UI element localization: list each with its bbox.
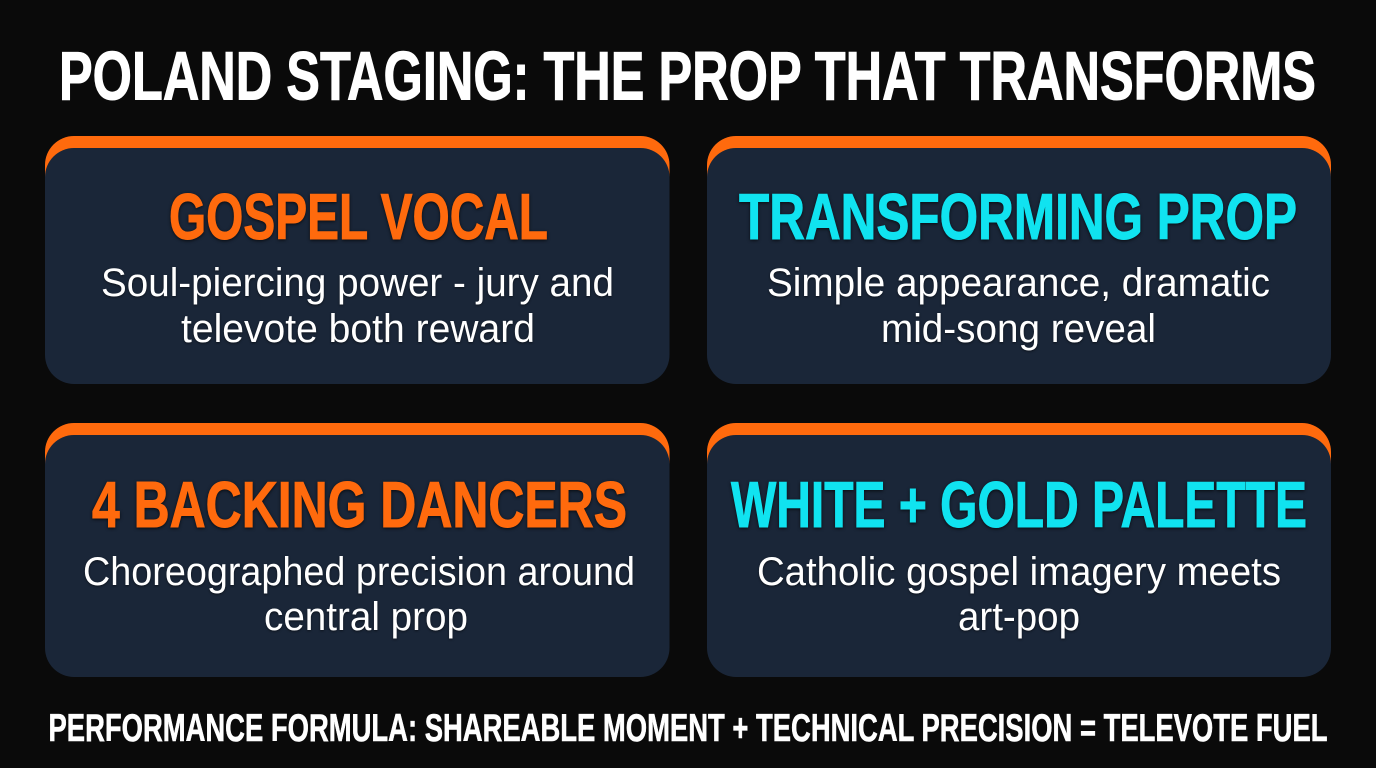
text: gospel vocal description: Soul-piercing power - jury and	[101, 261, 614, 305]
text: palette description	[757, 550, 1281, 639]
text: backing dancers description: Choreographed precision around	[83, 550, 635, 594]
panel: gospel vocal	[45, 136, 670, 384]
text: backing dancers description: central prop	[264, 595, 468, 639]
heading: backing dancers: 4 BACKING DANCERS	[92, 468, 627, 541]
text: transforming prop description: Simple appearance, dramatic	[767, 261, 1270, 305]
text: palette description: Catholic gospel imagery meets	[757, 550, 1281, 594]
panel: transforming prop	[707, 136, 1331, 384]
text: palette description: art-pop	[958, 595, 1080, 639]
text: gospel vocal description	[101, 261, 614, 351]
heading: gospel vocal: GOSPEL VOCAL	[169, 180, 548, 253]
panel: backing dancers	[45, 423, 670, 677]
text: gospel vocal description: televote both reward	[181, 307, 535, 351]
text: transforming prop description	[767, 261, 1270, 351]
text: transforming prop description: mid-song reveal	[881, 307, 1156, 351]
panel: white and gold palette	[707, 423, 1331, 677]
text: backing dancers description	[83, 550, 635, 639]
